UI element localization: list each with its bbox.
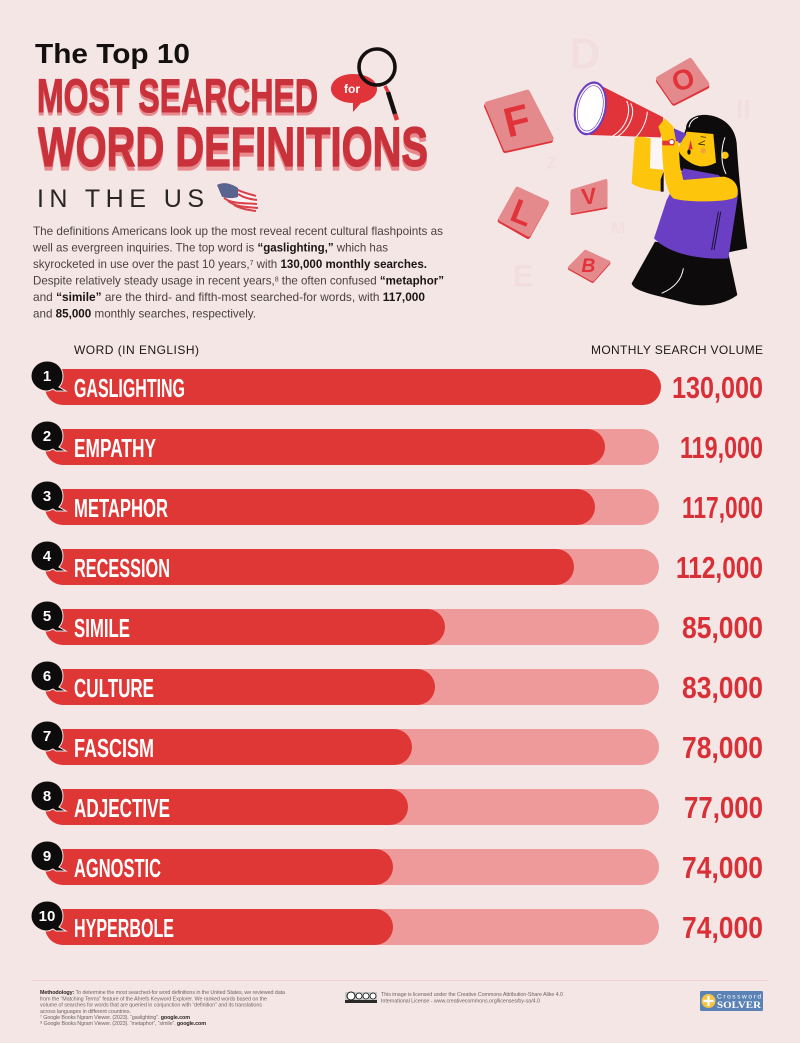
tile: O: O	[668, 62, 699, 99]
license text	[381, 992, 563, 1004]
methodology footnote: ⁷ Google Books Ngram Viewer. (2023). “gaslighting”. google.com	[40, 1015, 190, 1021]
faint background letters: M	[611, 218, 625, 237]
methodology footnote: across languages in different countries.	[40, 1009, 131, 1015]
title	[35, 38, 428, 213]
row 6: culture	[31, 661, 763, 705]
tile: F	[487, 92, 551, 150]
intro paragraph: skyrocketed in use over the past 10 years,	[33, 258, 250, 271]
icon: US flag	[217, 183, 258, 211]
telescope eyepiece	[674, 128, 687, 143]
faint background letters: D	[569, 30, 601, 78]
row 9: agnostic	[31, 841, 763, 885]
intro paragraph	[32, 225, 444, 320]
tile: L: L	[505, 193, 538, 234]
back arm	[632, 135, 663, 192]
row 9: agnostic: 74,000	[682, 850, 763, 885]
methodology footnote: from the “Matching Terms” feature of the Ahrefs Keyword Explorer. We ranked words based on the	[40, 996, 267, 1002]
logo: Crossword Solver: SOLVER	[717, 1000, 762, 1011]
row 4: recession: 4	[43, 548, 52, 565]
row 9: agnostic: 9	[43, 848, 51, 865]
illustration: woman with telescope and letter tiles	[487, 30, 751, 305]
row 1: gaslighting: GASLIGHTING	[74, 373, 185, 403]
faint background letters: II	[736, 94, 751, 124]
icon: for speech bubble	[331, 74, 377, 112]
column heading: monthly search volume: MONTHLY SEARCH VOLUME	[591, 343, 763, 357]
row 7: fascism	[31, 721, 763, 765]
license text: This image is licensed under the Creative Commons Attribution-Share Alike 4.0	[381, 992, 563, 998]
top	[654, 168, 738, 259]
tile: O	[659, 61, 707, 103]
row 4: recession	[31, 541, 763, 585]
title line: Most Searched: MOST SEARCHED	[37, 72, 318, 125]
row 3: metaphor	[31, 481, 763, 525]
tile: B: B	[581, 256, 595, 277]
intro paragraph: with	[253, 258, 280, 271]
methodology footnote: ⁸ Google Books Ngram Viewer. (2023). “metaphor”, “simile”. google.com	[40, 1021, 206, 1027]
front arm	[662, 137, 738, 201]
row 1: gaslighting: 130,000	[672, 370, 763, 405]
row 10: hyperbole	[31, 901, 763, 945]
row 7: fascism: 78,000	[682, 730, 763, 765]
tile: V: V	[580, 182, 598, 210]
row 1: gaslighting	[31, 361, 763, 405]
intro paragraph: and 85,000 monthly searches, respectively.	[33, 308, 256, 320]
row 2: empathy: 2	[43, 428, 51, 445]
methodology footnote: volume of searches for words that are queried in conjunction with “definition” and its translations	[40, 1002, 262, 1008]
row 6: culture: 6	[43, 668, 51, 685]
license badge	[345, 992, 377, 1003]
tile: B	[569, 251, 609, 282]
window between arms	[649, 138, 663, 169]
row 10: hyperbole: 74,000	[682, 910, 763, 945]
intro paragraph: the often confused	[279, 274, 380, 288]
row 5: simile	[31, 601, 763, 645]
row 8: adjective: 77,000	[684, 790, 763, 825]
icon: for speech bubble: for	[344, 82, 360, 96]
row 2: empathy: EMPATHY	[74, 433, 156, 463]
intro paragraph: 8	[275, 276, 279, 284]
row 5: simile: SIMILE	[74, 613, 130, 643]
tile: F: F	[499, 95, 535, 146]
row 8: adjective: 8	[43, 788, 51, 805]
intro paragraph: 130,000 monthly searches.	[280, 258, 427, 271]
intro paragraph: 7	[250, 260, 254, 267]
title line: Word Definitions: WORD DEFINITIONS	[38, 119, 428, 182]
row 9: agnostic: AGNOSTIC	[74, 853, 161, 883]
intro paragraph: well as evergreen inquiries. The top word is “gaslighting,” which has	[32, 242, 388, 254]
row 8: adjective: ADJECTIVE	[74, 793, 170, 823]
woman figure	[569, 78, 747, 305]
row 8: adjective	[31, 781, 763, 825]
title line: The Top 10: The Top 10	[35, 38, 190, 69]
row 6: culture: CULTURE	[74, 673, 154, 703]
tile: V	[572, 180, 606, 214]
hair	[678, 115, 747, 252]
faint background letters	[513, 30, 751, 294]
row 3: metaphor: 3	[43, 488, 51, 505]
row 5: simile: 5	[43, 608, 51, 625]
logo: Crossword Solver	[700, 991, 763, 1011]
row 4: recession: RECESSION	[74, 553, 170, 583]
intro paragraph: The definitions Americans look up the most reveal recent cultural flashpoints as	[33, 225, 443, 238]
row 3: metaphor: 117,000	[682, 490, 763, 525]
row 2: empathy	[31, 421, 763, 465]
methodology footnote: Methodology: To determine the most searched-for word definitions in the United States, we reviewed data	[40, 990, 285, 996]
title line: Most Searched	[37, 69, 318, 125]
row 10: hyperbole: 10	[39, 908, 55, 925]
faint background letters: E	[513, 258, 534, 294]
intro paragraph: “metaphor”	[380, 274, 444, 288]
row 2: empathy: 119,000	[680, 430, 763, 465]
face	[678, 132, 716, 166]
title line: Word Definitions: WORD DEFINITIONS	[38, 115, 428, 178]
telescope lens	[569, 78, 612, 138]
column heading: word: WORD (IN ENGLISH)	[74, 343, 199, 357]
title line: Word Definitions	[38, 115, 428, 182]
methodology footnote	[40, 990, 285, 1027]
watch	[662, 141, 674, 145]
row 10: hyperbole: HYPERBOLE	[74, 913, 174, 943]
row 5: simile: 85,000	[682, 610, 763, 645]
faint background letters: Z	[547, 153, 557, 172]
skirt	[632, 242, 737, 305]
row 3: metaphor: METAPHOR	[74, 493, 168, 523]
logo: Crossword Solver: Crossword	[717, 994, 761, 1000]
row 7: fascism: 7	[43, 728, 51, 745]
row 6: culture: 83,000	[682, 670, 763, 705]
intro paragraph: Despite relatively steady usage in recent years,	[33, 274, 276, 288]
license text: International License - www.creativecommons.org/licenses/by-sa/4.0	[381, 998, 540, 1004]
bar chart	[31, 361, 763, 945]
telescope body	[590, 83, 663, 137]
row 7: fascism: FASCISM	[74, 733, 154, 763]
tile: L	[500, 189, 547, 237]
intro paragraph: and “simile” are the third- and fifth-most searched-for words, with 117,000	[33, 291, 425, 304]
row 4: recession: 112,000	[676, 550, 763, 585]
icon: magnifying glass	[359, 49, 397, 120]
title line: In the US: IN THE US	[37, 185, 204, 213]
title line: Most Searched: MOST SEARCHED	[37, 69, 318, 122]
row 1: gaslighting: 1	[43, 368, 51, 385]
